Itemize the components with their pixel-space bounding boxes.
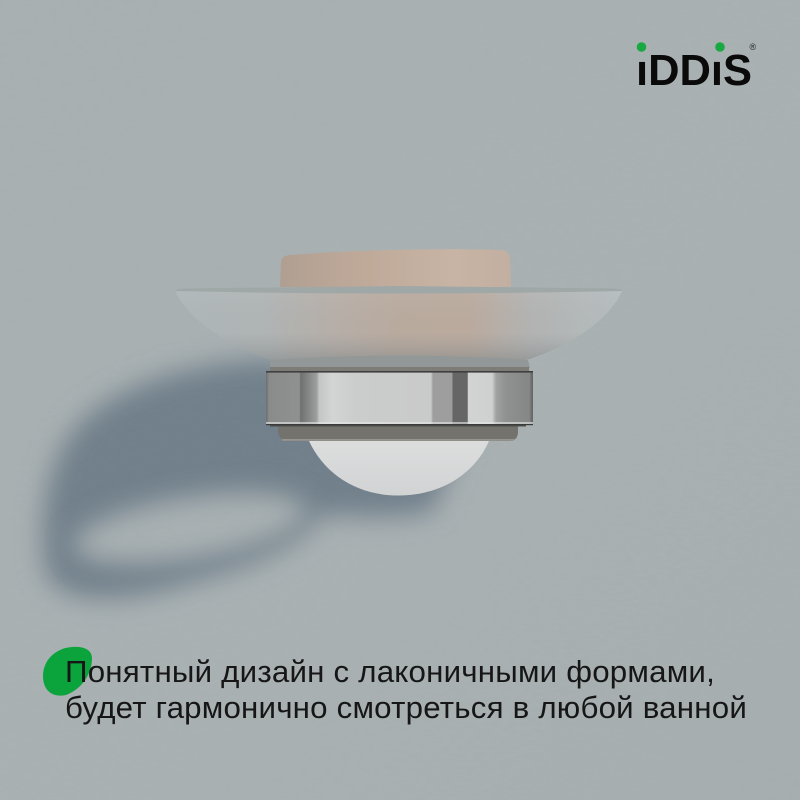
bowl rim (175, 286, 622, 294)
registered mark: ® (750, 42, 756, 52)
cast shadow (43, 358, 480, 598)
logo wordmark: ıDDıS (636, 46, 752, 95)
chrome ring (266, 367, 533, 425)
logo green dots (637, 42, 725, 52)
white wall plate (309, 441, 489, 496)
caption line 2: будет гармонично смотреться в любой ванной (65, 690, 747, 725)
bowl base (270, 356, 530, 368)
green accent blob (43, 647, 92, 696)
lower cuff (270, 424, 526, 441)
glass bowl (175, 286, 622, 360)
soap bar (280, 249, 511, 287)
caption line 1: Понятный дизайн с лаконичными формами, (65, 654, 715, 689)
soap dish product (175, 249, 622, 496)
iDDiS logo (636, 42, 756, 95)
caption (65, 654, 747, 725)
